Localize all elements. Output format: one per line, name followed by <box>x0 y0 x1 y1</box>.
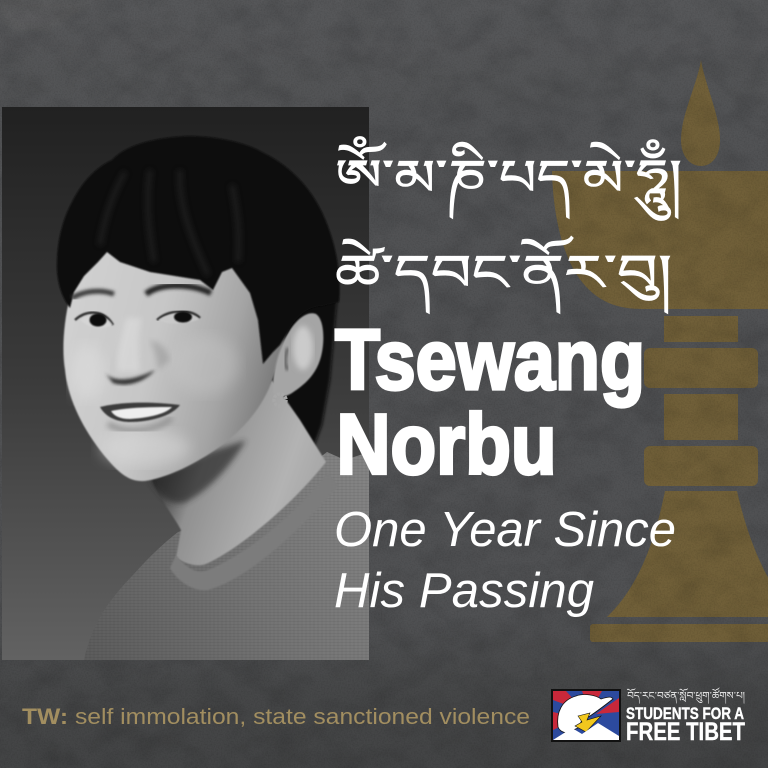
logo lightning <box>575 713 601 732</box>
ear <box>273 313 323 397</box>
panel: black and white portrait photo <box>2 107 369 660</box>
subtitle line 1: One Year Since <box>334 503 676 557</box>
forehead and cheek highlights <box>70 318 239 466</box>
lamp foot strip <box>590 624 768 642</box>
back of neck hair <box>272 302 338 445</box>
logo mountain <box>553 723 619 740</box>
tibetan line 1: ཨོཾ་མ་ཎི་པད་མེ་ཧཱུྃ། <box>335 123 682 263</box>
lower lip shade <box>108 418 172 430</box>
logo tibetan name: བོད་རང་བཙན་སློབ་ཕྲུག་ཚོགས་པ། <box>627 685 745 713</box>
logo line 2: FREE TIBET <box>626 718 745 746</box>
nose shadow <box>105 340 170 385</box>
logo flag emblem <box>551 689 621 742</box>
earring <box>282 395 288 403</box>
teeth <box>111 407 172 419</box>
lamp stem ring <box>664 316 738 342</box>
under-jaw shadow <box>150 440 246 503</box>
sweater <box>84 452 369 660</box>
hair <box>57 136 340 364</box>
icon: golden butter lamp <box>552 60 768 642</box>
name line 1: Tsewang <box>335 313 645 408</box>
logo: students for a free tibet <box>551 685 745 746</box>
name line 2: Norbu <box>336 398 556 492</box>
photo backdrop <box>2 107 369 660</box>
lamp flame <box>681 60 720 166</box>
lamp upper disc <box>644 348 758 388</box>
subtitle <box>334 503 676 618</box>
lamp bowl <box>552 171 768 309</box>
lamp lower disc <box>644 446 758 486</box>
tibetan heading <box>335 123 682 358</box>
mouth and smile <box>100 403 180 422</box>
right eye <box>157 311 200 324</box>
name title <box>335 313 645 492</box>
tibetan line 2: ཚེ་དབང་ནོར་བུ། <box>335 218 672 358</box>
lamp base <box>607 491 768 617</box>
sweater collar <box>170 472 338 590</box>
subtitle line 2: His Passing <box>334 564 594 618</box>
lamp stem block <box>664 394 738 440</box>
eyebrows <box>72 286 211 298</box>
left eye <box>75 313 113 328</box>
face <box>63 230 290 481</box>
hair highlights <box>100 170 239 275</box>
trigger warning: TW: self immolation, state sanctioned violence <box>22 704 530 729</box>
logo dove <box>558 695 613 733</box>
neck <box>152 380 326 565</box>
